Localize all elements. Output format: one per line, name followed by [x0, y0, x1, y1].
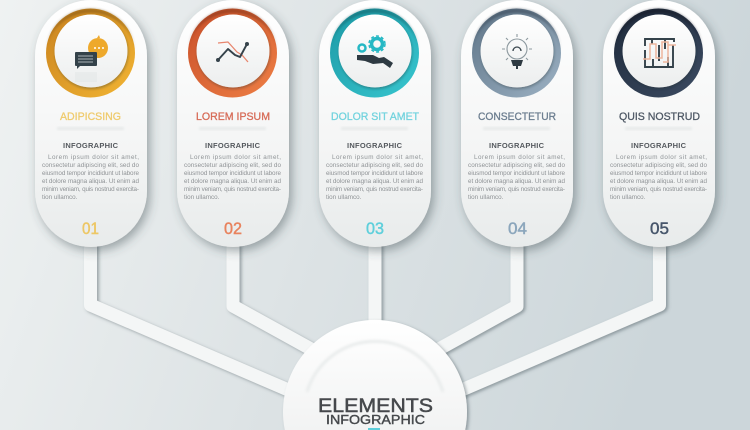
ring 05 [614, 8, 703, 97]
body text 03: tion ullamco. [326, 194, 362, 201]
number 02: 02 [224, 220, 242, 238]
connector 03 [368, 235, 382, 335]
icon: speech bubbles [75, 35, 108, 82]
card 03 [319, 0, 431, 247]
body text 03: eiusmod tempor incididunt ut labore [326, 170, 423, 177]
connectors [90, 235, 660, 395]
number 04: 04 [508, 220, 527, 238]
icon: hand with gears [357, 36, 393, 68]
subtitle 03: INFOGRAPHIC [347, 141, 403, 150]
central icon top [368, 428, 380, 430]
connector 04 [430, 235, 517, 354]
body text 03: Lorem ipsum dolor sit amet, [332, 154, 423, 161]
label 04: CONSECTETUR [478, 111, 556, 123]
body text 02: et dolore magna aliqua. Ut enim ad [184, 178, 281, 185]
body text 02: minim veniam, quis nostrud exercita- [184, 186, 281, 193]
body text 04: consectetur adipiscing elit, sed do [468, 162, 565, 169]
body text 01: consectetur adipiscing elit, sed do [42, 162, 139, 169]
body text 02: consectetur adipiscing elit, sed do [184, 162, 281, 169]
label 03: DOLOR SIT AMET [331, 111, 419, 123]
body text 01: minim veniam, quis nostrud exercita- [42, 186, 139, 193]
body text 04: tion ullamco. [468, 194, 504, 201]
body text 04 [468, 154, 565, 201]
body text 05: Lorem ipsum dolor sit amet, [616, 154, 707, 161]
body text 05: tion ullamco. [610, 194, 646, 201]
icon: line chart [216, 42, 249, 62]
connector 05 [450, 235, 660, 395]
label 02: LOREM IPSUM [196, 111, 270, 123]
card 04 [461, 0, 573, 247]
body text 02: tion ullamco. [184, 194, 220, 201]
body text 04: Lorem ipsum dolor sit amet, [474, 154, 565, 161]
body text 04: et dolore magna aliqua. Ut enim ad [468, 178, 565, 185]
body text 05: eiusmod tempor incididunt ut labore [610, 170, 707, 177]
subtitle 05: INFOGRAPHIC [631, 141, 687, 150]
body text 04: eiusmod tempor incididunt ut labore [468, 170, 565, 177]
number 05: 05 [650, 220, 669, 238]
card 05 [603, 0, 715, 247]
ring 04 [472, 8, 561, 97]
ring 01 [46, 8, 135, 97]
body text 02 [184, 154, 281, 201]
label 05: QUIS NOSTRUD [619, 111, 700, 123]
body text 03: minim veniam, quis nostrud exercita- [326, 186, 423, 193]
central circle [283, 320, 467, 430]
number 01: 01 [82, 220, 99, 238]
body text 05: consectetur adipiscing elit, sed do [610, 162, 707, 169]
card 02 [177, 0, 289, 247]
central title: ELEMENTS [318, 395, 433, 417]
body text 05: minim veniam, quis nostrud exercita- [610, 186, 707, 193]
body text 04: minim veniam, quis nostrud exercita- [468, 186, 565, 193]
body text 01 [42, 154, 139, 201]
ring 02 [188, 8, 277, 97]
connector 01 [90, 235, 300, 395]
body text 01: et dolore magna aliqua. Ut enim ad [42, 178, 139, 185]
subtitle 01: INFOGRAPHIC [63, 141, 119, 150]
body text 01: Lorem ipsum dolor sit amet, [48, 154, 139, 161]
body text 05 [610, 154, 707, 201]
label 01: ADIPICSING [60, 111, 121, 123]
subtitle 04: INFOGRAPHIC [489, 141, 545, 150]
body text 02: eiusmod tempor incididunt ut labore [184, 170, 281, 177]
icon: light bulb [502, 34, 532, 69]
card 01 [35, 0, 147, 247]
connector 02 [233, 235, 320, 354]
body text 03: et dolore magna aliqua. Ut enim ad [326, 178, 423, 185]
ring 03 [330, 8, 419, 97]
number 03: 03 [366, 220, 384, 238]
body text 01: tion ullamco. [42, 194, 78, 201]
body text 05: et dolore magna aliqua. Ut enim ad [610, 178, 707, 185]
icon: maze [643, 39, 676, 67]
body text 01: eiusmod tempor incididunt ut labore [42, 170, 139, 177]
body text 02: Lorem ipsum dolor sit amet, [190, 154, 281, 161]
central subtitle: INFOGRAPHIC [326, 412, 425, 427]
body text 03: consectetur adipiscing elit, sed do [326, 162, 423, 169]
subtitle 02: INFOGRAPHIC [205, 141, 261, 150]
body text 03 [326, 154, 423, 201]
